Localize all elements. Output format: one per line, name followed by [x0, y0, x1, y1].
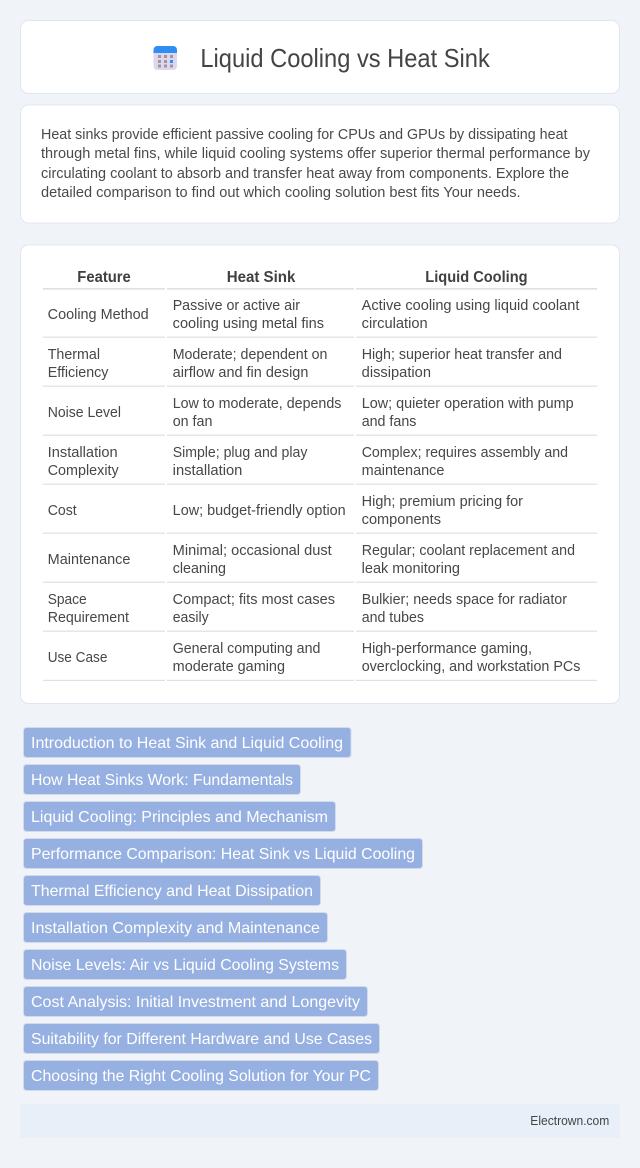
row: cost: components: [362, 512, 441, 528]
row: installation complexity: maintenance: [362, 463, 444, 479]
topic chip 4: [24, 838, 422, 868]
row: thermal efficiency: High; superior heat transfer and: [362, 347, 562, 363]
panel: comparison table: [20, 245, 620, 704]
row: cost: High; premium pricing for: [362, 494, 523, 510]
table header: [43, 269, 597, 290]
row: space requirement: Bulkier; needs space for radiator: [362, 592, 567, 608]
row: maintenance: [43, 543, 597, 583]
row: installation complexity: [43, 445, 597, 485]
topic chip 8: [24, 986, 368, 1016]
row: noise level: on fan: [173, 414, 212, 430]
row: use case: overclocking, and workstation PCs: [362, 659, 580, 675]
list: section topics: [24, 728, 422, 1090]
row: space requirement: easily: [173, 610, 209, 626]
topic chip 1: Introduction to Heat Sink and Liquid Cooling: [31, 735, 343, 752]
row: thermal efficiency: Efficiency: [48, 365, 109, 381]
row: cooling method: Passive or active air: [173, 298, 300, 314]
row: use case: [43, 641, 597, 681]
row: thermal efficiency: Thermal: [48, 347, 100, 363]
row: noise level: Noise Level: [48, 405, 121, 421]
row: maintenance: Maintenance: [48, 552, 130, 568]
row: maintenance: leak monitoring: [362, 561, 460, 577]
topic chip 10: [24, 1060, 378, 1090]
title: Liquid Cooling vs Heat Sink: [200, 45, 490, 73]
table header: Liquid Cooling: [425, 269, 528, 286]
row: cooling method: Cooling Method: [48, 307, 149, 323]
icon: calendar: [154, 46, 177, 70]
row: use case: High-performance gaming,: [362, 641, 532, 657]
table header: Feature: [77, 269, 131, 286]
row: thermal efficiency: airflow and fin design: [173, 365, 308, 381]
row: use case: moderate gaming: [173, 659, 285, 675]
row: maintenance: Minimal; occasional dust: [173, 543, 332, 559]
topic chip 8: Cost Analysis: Initial Investment and Longevity: [31, 994, 360, 1011]
text block: intro paragraph: circulating coolant to absorb and transfer heat away from components. Explore the: [41, 166, 569, 182]
row: noise level: Low; quieter operation with pump: [362, 396, 574, 412]
row: installation complexity: Complexity: [48, 463, 119, 479]
topic chip 5: Thermal Efficiency and Heat Dissipation: [31, 883, 313, 900]
row: maintenance: cleaning: [173, 561, 226, 577]
row: cost: Cost: [48, 503, 77, 519]
row: cost: Low; budget-friendly option: [173, 503, 346, 519]
row: space requirement: Requirement: [48, 610, 129, 626]
row: space requirement: [43, 592, 597, 632]
topic chip 2: [24, 764, 300, 794]
topic chip 1: [24, 728, 351, 758]
text block: intro paragraph: through metal fins, while liquid cooling systems offer superior thermal performance by: [41, 146, 591, 162]
row: installation complexity: Simple; plug and play: [173, 445, 308, 461]
footer: Electrown.com: [530, 1113, 609, 1128]
topic chip 9: Suitability for Different Hardware and Use Cases: [31, 1031, 372, 1048]
topic chip 3: [24, 802, 336, 832]
row: noise level: and fans: [362, 414, 416, 430]
row: space requirement: Space: [48, 592, 87, 608]
row: noise level: Low to moderate, depends: [173, 396, 341, 412]
topic chip 6: Installation Complexity and Maintenance: [31, 920, 320, 937]
topic chip 6: [24, 912, 328, 942]
row: cooling method: circulation: [362, 316, 428, 332]
row: maintenance: Regular; coolant replacement and: [362, 543, 575, 559]
topic chip 2: How Heat Sinks Work: Fundamentals: [31, 772, 293, 789]
topic chip 3: Liquid Cooling: Principles and Mechanism: [31, 809, 328, 826]
row: thermal efficiency: [43, 347, 597, 387]
row: thermal efficiency: Moderate; dependent on: [173, 347, 327, 363]
topic chip 5: [24, 876, 320, 906]
table header: Heat Sink: [227, 269, 296, 286]
row: use case: General computing and: [173, 641, 320, 657]
row: space requirement: and tubes: [362, 610, 424, 626]
row: use case: Use Case: [48, 650, 107, 666]
row: cooling method: Active cooling using liquid coolant: [362, 298, 579, 314]
row: installation complexity: Installation: [48, 445, 118, 461]
panel: title card: [20, 20, 620, 94]
row: cost: [43, 494, 597, 534]
row: noise level: [43, 396, 597, 436]
panel: introduction text: [20, 105, 620, 223]
row: cooling method: cooling using metal fins: [173, 316, 324, 332]
topic chip 7: Noise Levels: Air vs Liquid Cooling Systems: [31, 957, 339, 974]
text block: intro paragraph: Heat sinks provide efficient passive cooling for CPUs and GPUs by dissipating heat: [41, 127, 568, 143]
topic chip 4: Performance Comparison: Heat Sink vs Liquid Cooling: [31, 846, 415, 863]
text block: intro paragraph: detailed comparison to find out which cooling solution best fits Your needs.: [41, 185, 521, 201]
topic chip 10: Choosing the Right Cooling Solution for Your PC: [31, 1068, 371, 1085]
row: cooling method: [43, 298, 597, 338]
row: thermal efficiency: dissipation: [362, 365, 431, 381]
topic chip 7: [24, 950, 346, 980]
footer: [20, 1104, 620, 1138]
row: space requirement: Compact; fits most cases: [173, 592, 335, 608]
row: installation complexity: installation: [173, 463, 242, 479]
text block: intro paragraph: [41, 127, 591, 201]
row: installation complexity: Complex; requires assembly and: [362, 445, 568, 461]
topic chip 9: [24, 1024, 380, 1054]
